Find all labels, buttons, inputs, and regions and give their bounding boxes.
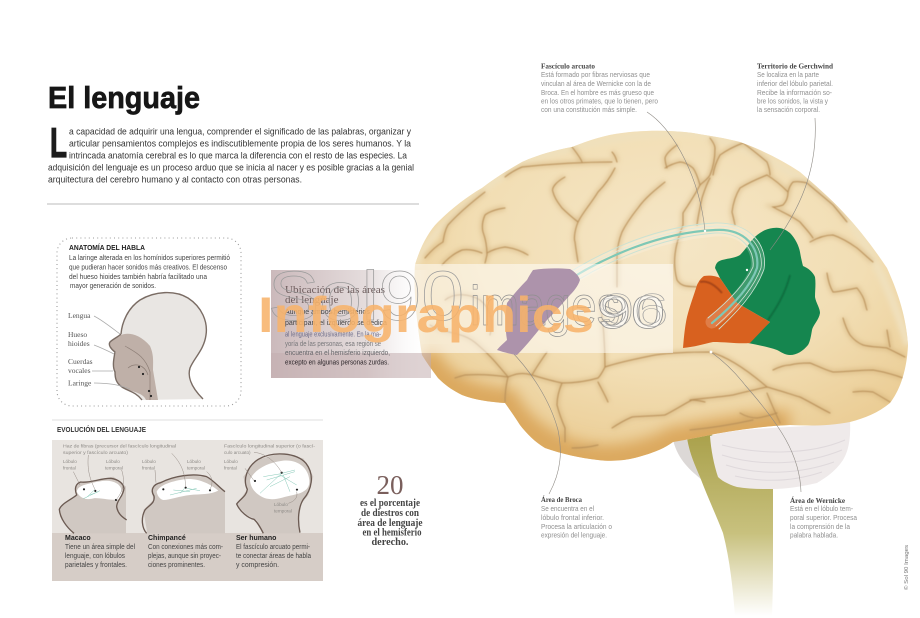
label: territorio de geschwind: inferior del lóbulo parietal. bbox=[757, 79, 833, 88]
small anatomical labels bbox=[63, 444, 316, 514]
label: área de broca: Se encuentra en el bbox=[541, 504, 594, 513]
panel: ubicación de las áreas del lenguaje: Aunque ambos hemisferios bbox=[285, 309, 370, 316]
illustration: brain bbox=[414, 112, 908, 616]
description: que pudieran hacer sonidos más creativos. El descenso bbox=[69, 264, 227, 272]
caption: macaco: parietales y frontales. bbox=[65, 562, 127, 569]
panel: ubicación de las áreas del lenguaje bbox=[271, 270, 431, 378]
label: área de broca: lóbulo frontal inferior. bbox=[541, 513, 604, 522]
label: área de broca: Procesa la articulación o bbox=[541, 522, 612, 531]
cerebellum bbox=[710, 420, 850, 489]
small anatomical labels: frontal bbox=[224, 466, 237, 470]
small anatomical labels: Lóbulo bbox=[187, 459, 201, 464]
panel: ubicación de las áreas del lenguaje: yoría de las personas, esa región se bbox=[285, 341, 381, 348]
caption: macaco: lenguaje, con lóbulos bbox=[65, 553, 125, 560]
callout: 20 por ciento bbox=[358, 470, 423, 548]
leader lines bbox=[510, 112, 815, 494]
small anatomical labels: temporal bbox=[274, 508, 292, 514]
label: fascículo arcuato: en los otros primates, que lo tienen, pero bbox=[541, 96, 658, 106]
arcuate fasciculus bbox=[556, 223, 765, 329]
panel: ubicación de las áreas del lenguaje: excepto en algunas personas zurdas. bbox=[285, 360, 389, 366]
heading: anatomía del habla: ANATOMÍA DEL HABLA bbox=[69, 243, 145, 252]
description bbox=[69, 255, 230, 290]
callout: 20 por ciento: 20 bbox=[376, 470, 404, 500]
label: territorio de geschwind: bre los sonidos, la vista y bbox=[757, 96, 828, 106]
callout: 20 por ciento: de diestros con bbox=[361, 508, 419, 519]
label: área de wernicke: la comprensión de la bbox=[790, 522, 850, 531]
callout: 20 por ciento: es el porcentaje bbox=[360, 498, 420, 509]
intro text block bbox=[48, 119, 414, 186]
watermark text bbox=[258, 257, 668, 343]
anatomy labels: Lengua bbox=[68, 311, 91, 320]
intro text block: intrincada anatomía cerebral es lo que marca la diferencia con el resto de las especies. La bbox=[69, 150, 408, 162]
broca's area bbox=[497, 268, 580, 355]
anatomy labels: hioides bbox=[68, 339, 90, 348]
illustration: macaco, chimpancé, humano bbox=[59, 452, 313, 533]
small anatomical labels: temporal bbox=[187, 466, 205, 470]
callout: 20 por ciento: derecho. bbox=[372, 537, 409, 548]
caption: chimpancé: Chimpancé bbox=[148, 535, 186, 542]
label: área de wernicke: palabra hablada. bbox=[790, 530, 838, 540]
icon: head cross-section bbox=[92, 293, 206, 400]
intro text block: articular pensamientos complejos es indiscutiblemente propia de los seres humanos. Y la bbox=[69, 138, 412, 150]
title: El lenguaje bbox=[48, 80, 200, 115]
credit: © Sol 90 Images bbox=[903, 545, 910, 590]
label: área de wernicke bbox=[790, 495, 857, 540]
caption: ser humano bbox=[236, 535, 311, 569]
wernicke area bbox=[715, 228, 820, 355]
panel: evolución del lenguaje bbox=[52, 425, 323, 581]
small anatomical labels: Lóbulo bbox=[63, 459, 77, 464]
panel: ubicación de las áreas del lenguaje: al lenguaje exclusivamente. En la ma- bbox=[285, 332, 382, 338]
caption: ser humano: y compresión. bbox=[236, 562, 279, 569]
caption: ser humano: Ser humano bbox=[236, 535, 276, 542]
caption: ser humano: te conectar áreas de habla bbox=[236, 553, 311, 560]
label: territorio de geschwind bbox=[757, 62, 833, 114]
label: fascículo arcuato: con una constitución más simple. bbox=[541, 105, 637, 114]
caption: chimpancé: ciones prominentes. bbox=[148, 562, 205, 569]
callout: 20 por ciento: área de lenguaje bbox=[358, 518, 423, 529]
panel: ubicación de las áreas del lenguaje: encuentra en el hemisferio izquierdo, bbox=[285, 350, 390, 357]
small anatomical labels: superior y fascículo arcuato) bbox=[63, 450, 129, 455]
heading: evolución del lenguaje: EVOLUCIÓN DEL LENGUAJE bbox=[57, 425, 146, 434]
brainstem back bbox=[673, 440, 720, 480]
label: área de broca bbox=[541, 494, 612, 540]
description: mayor generación de sonidos. bbox=[70, 283, 156, 290]
intro text block: adquisición del lenguaje es un proceso arduo que se inicia al nacer y es posible gracias a la genial bbox=[48, 162, 414, 174]
watermark text: images bbox=[470, 274, 620, 337]
small anatomical labels: Lóbulo bbox=[274, 502, 288, 507]
description: La laringe alterada en los homínidos superiores permitió bbox=[69, 255, 230, 262]
label: fascículo arcuato: Broca. En el hombre es más grueso que bbox=[541, 88, 654, 97]
caption: macaco: Tiene un área simple del bbox=[65, 544, 135, 551]
label: territorio de geschwind: Recibe la información so- bbox=[757, 88, 833, 97]
geschwind orange area bbox=[683, 276, 770, 348]
label: área de wernicke: Área de Wernicke bbox=[790, 495, 845, 505]
small anatomical labels: culo arcuato) bbox=[224, 450, 251, 455]
gyri sulci bbox=[425, 138, 905, 448]
panel: ubicación de las áreas del lenguaje: participan, el izquierdo se dedica bbox=[285, 320, 387, 327]
small anatomical labels: Lóbulo bbox=[106, 459, 120, 464]
label: área de wernicke: Está en el lóbulo tem- bbox=[790, 504, 854, 513]
anatomy labels: vocales bbox=[68, 366, 91, 375]
small anatomical labels: frontal bbox=[142, 466, 155, 470]
label: territorio de geschwind: la sensación corporal. bbox=[757, 105, 820, 114]
small anatomical labels: Lóbulo bbox=[142, 459, 156, 464]
label: fascículo arcuato: vinculan al área de Wernicke con la de bbox=[541, 79, 651, 88]
small anatomical labels: temporal bbox=[105, 466, 123, 470]
callout: 20 por ciento: en el hemisferio bbox=[362, 528, 422, 538]
caption: chimpancé bbox=[148, 535, 224, 569]
small anatomical labels: frontal bbox=[63, 466, 76, 470]
label: fascículo arcuato: Fascículo arcuato bbox=[541, 62, 595, 70]
panel: ubicación de las áreas del lenguaje: del lenguaje bbox=[285, 294, 339, 306]
small anatomical labels: Fascículo longitudinal superior (o fascí- bbox=[224, 444, 316, 448]
small anatomical labels: Lóbulo bbox=[224, 459, 238, 464]
label: fascículo arcuato: Está formado por fibras nerviosas que bbox=[541, 70, 650, 79]
anatomy labels: Laringe bbox=[68, 378, 92, 388]
drop cap: L bbox=[50, 119, 67, 166]
watermark text: Sol90 bbox=[268, 257, 464, 335]
anatomy labels: Cuerdas bbox=[68, 357, 93, 366]
label: territorio de geschwind: Se localiza en la parte bbox=[757, 70, 819, 79]
label: área de broca: Área de Broca bbox=[541, 494, 582, 504]
description: del hueso hioides también habría facilitado una bbox=[69, 274, 207, 281]
small anatomical labels: Haz de fibras (precursor del fascículo longitudinal bbox=[63, 444, 176, 448]
panel: anatomía del habla bbox=[57, 238, 241, 406]
anatomy labels: Hueso bbox=[68, 330, 87, 339]
intro text block: a capacidad de adquirir una lengua, comprender el significado de las palabras, organizar y bbox=[69, 126, 411, 138]
label: área de wernicke: poral superior. Procesa bbox=[790, 513, 857, 522]
watermark text: 90 bbox=[597, 286, 665, 338]
caption: macaco bbox=[65, 535, 135, 569]
label: territorio de geschwind: Territorio de Gerchwind bbox=[757, 62, 833, 70]
label: área de broca: expresión del lenguaje. bbox=[541, 530, 607, 540]
label: fascículo arcuato bbox=[541, 62, 658, 114]
caption: chimpancé: Con conexiones más com- bbox=[148, 544, 224, 551]
panel: ubicación de las áreas del lenguaje: Ubicación de las áreas bbox=[285, 284, 385, 296]
caption: ser humano: El fascículo arcuato permi- bbox=[236, 544, 311, 551]
cerebrum bbox=[414, 131, 908, 461]
intro text block: arquitectura del cerebro humano y al contacto con otras personas. bbox=[48, 174, 302, 186]
watermark text: Infographics bbox=[258, 287, 594, 343]
brainstem bbox=[687, 432, 773, 616]
watermark band bbox=[271, 264, 673, 353]
caption: macaco: Macaco bbox=[65, 535, 91, 542]
anatomy labels bbox=[68, 311, 93, 388]
caption: chimpancé: plejas, aunque sin proyec- bbox=[148, 553, 222, 560]
watermark text: 96 bbox=[600, 284, 668, 336]
